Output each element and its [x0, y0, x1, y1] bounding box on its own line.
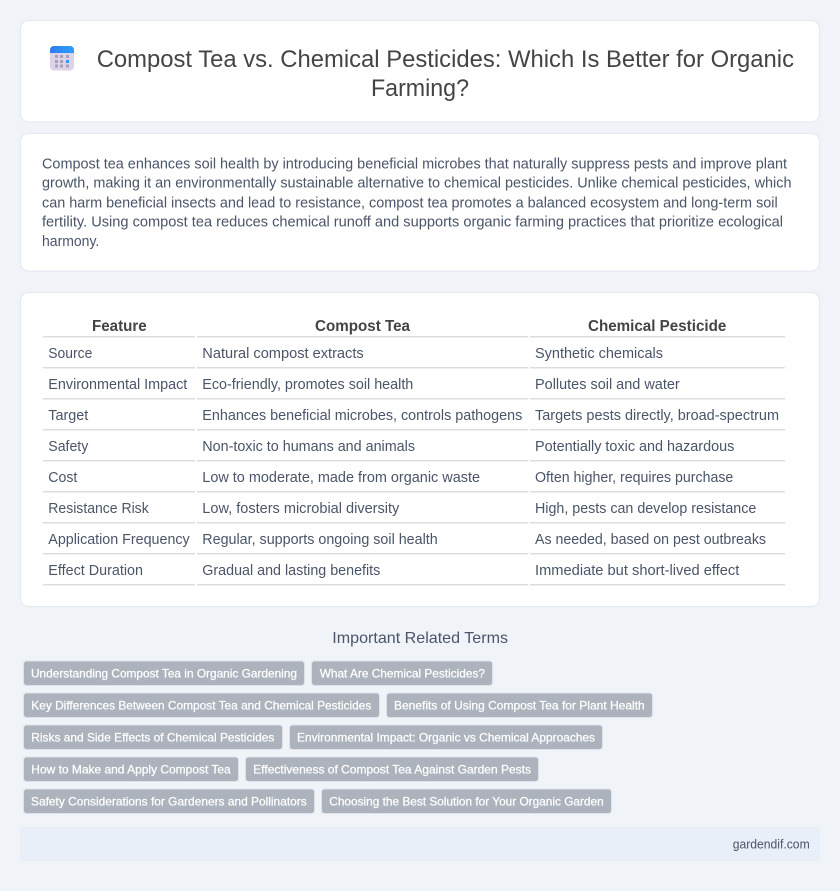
row: resistance risk [48, 501, 756, 517]
row: environmental impact: Pollutes soil and water [535, 377, 680, 393]
table header row: Compost Tea [315, 318, 410, 335]
tag: Effectiveness of Compost Tea Against Garden Pests [253, 762, 531, 776]
tag: Environmental Impact: Organic vs Chemical Approaches [297, 730, 595, 744]
row: environmental impact [48, 377, 680, 393]
row: cost: Cost [48, 470, 77, 486]
tag: What Are Chemical Pesticides? [320, 666, 485, 680]
title [97, 46, 794, 102]
row: cost [48, 470, 733, 486]
row: resistance risk: Low, fosters microbial diversity [202, 501, 400, 517]
row: effect duration [48, 563, 739, 579]
row: target: Target [48, 408, 88, 424]
intro paragraph: fertility. Using compost tea reduces chemical runoff and supports organic farming practices that prioritize ecological [42, 215, 783, 231]
tag: Safety Considerations for Gardeners and Pollinators [31, 794, 307, 808]
tag [290, 725, 602, 750]
row: target [48, 408, 779, 424]
tag [246, 757, 538, 782]
row: resistance risk: High, pests can develop resistance [535, 501, 756, 517]
row: source: Natural compost extracts [202, 346, 364, 362]
table header row [92, 318, 726, 335]
title: Compost Tea vs. Chemical Pesticides: Which Is Better for Organic [97, 46, 794, 73]
tag [322, 789, 612, 814]
tag [386, 693, 652, 718]
row: source: Source [48, 346, 92, 362]
footer bar [20, 827, 820, 861]
row: source [48, 346, 663, 362]
row: safety: Non-toxic to humans and animals [202, 439, 415, 455]
icon: calendar [50, 46, 74, 70]
row: cost: Low to moderate, made from organic waste [202, 470, 480, 486]
heading: important related terms: Important Related Terms [332, 630, 508, 647]
table header row: Chemical Pesticide [588, 318, 726, 335]
tag [312, 661, 492, 686]
intro paragraph: growth, making it an environmentally sustainable alternative to chemical pesticides. Unlike chemical pesticides, which [42, 176, 792, 192]
tag [24, 725, 282, 750]
row: cost: Often higher, requires purchase [535, 470, 733, 486]
row: safety [48, 439, 734, 455]
tag: Benefits of Using Compost Tea for Plant Health [394, 698, 645, 712]
row: application frequency: As needed, based on pest outbreaks [535, 532, 766, 548]
row: environmental impact: Environmental Impact [48, 377, 187, 393]
row: application frequency [48, 532, 766, 548]
panel: comparison table [20, 292, 820, 606]
tag [24, 789, 314, 814]
tag: Risks and Side Effects of Chemical Pesticides [31, 730, 274, 744]
tag: Understanding Compost Tea in Organic Gardening [31, 666, 297, 680]
panel: title header [20, 20, 820, 122]
tag [24, 693, 380, 718]
tag [24, 661, 304, 686]
row: source: Synthetic chemicals [535, 346, 663, 362]
row: safety: Potentially toxic and hazardous [535, 439, 734, 455]
row: safety: Safety [48, 439, 89, 455]
footer bar: gardendif.com [733, 836, 810, 851]
tag: Choosing the Best Solution for Your Organic Garden [329, 794, 604, 808]
panel: intro text [20, 134, 820, 271]
intro paragraph: can harm beneficial insects and lead to resistance, compost tea promotes a balanced ecosystem and long-term soil [42, 195, 778, 211]
intro paragraph: harmony. [42, 234, 99, 250]
row: environmental impact: Eco-friendly, promotes soil health [202, 377, 413, 393]
tag: Key Differences Between Compost Tea and Chemical Pesticides [31, 698, 371, 712]
row: effect duration: Effect Duration [48, 563, 143, 579]
row: resistance risk: Resistance Risk [48, 501, 149, 517]
row: target: Targets pests directly, broad-spectrum [535, 408, 779, 424]
row: target: Enhances beneficial microbes, controls pathogens [202, 408, 522, 424]
tag: How to Make and Apply Compost Tea [31, 762, 231, 776]
tag [24, 757, 238, 782]
intro paragraph [42, 156, 792, 250]
table header row: Feature [92, 318, 147, 335]
row: effect duration: Gradual and lasting benefits [202, 563, 380, 579]
row: application frequency: Application Frequency [48, 532, 190, 548]
row: effect duration: Immediate but short-lived effect [535, 563, 739, 579]
related terms tags [24, 661, 652, 814]
intro paragraph: Compost tea enhances soil health by introducing beneficial microbes that naturally suppress pests and improve plant [42, 156, 787, 172]
title: Farming? [371, 75, 469, 102]
row: application frequency: Regular, supports ongoing soil health [202, 532, 438, 548]
